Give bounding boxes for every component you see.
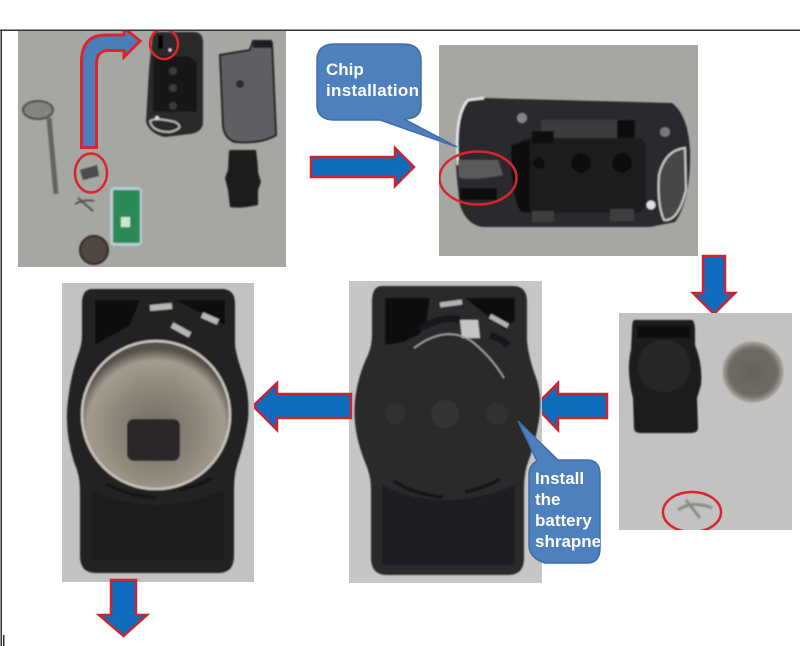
callout ring: chip location xyxy=(440,152,516,204)
arrow: step three to step four xyxy=(535,383,607,430)
icon: coin battery xyxy=(80,236,108,264)
icon: fob shell with cavity xyxy=(146,32,203,137)
callout ring: shrapnel xyxy=(663,492,721,532)
icon: small battery holder xyxy=(629,320,701,433)
icon: rubber battery holder xyxy=(67,289,248,573)
callout: chip installation xyxy=(317,44,457,147)
icon: chip xyxy=(80,165,99,180)
icon: coin battery xyxy=(724,342,782,402)
panel: battery fitted in holder xyxy=(62,283,254,582)
callout ring: chip xyxy=(75,154,107,192)
icon: back cover xyxy=(220,40,276,142)
callout: install the battery shrapnel: shrapnel xyxy=(535,532,606,551)
callout: install the battery shrapnel: Install xyxy=(535,469,584,488)
icon: rubber battery holder xyxy=(354,286,540,575)
panel: holder, battery and shrapnel xyxy=(619,313,792,532)
icon: three screws xyxy=(533,153,632,173)
callout: install the battery shrapnel: the xyxy=(535,490,560,509)
icon: circuit board xyxy=(110,187,142,246)
callout ring: chip slot xyxy=(150,29,178,59)
icon: battery holder small xyxy=(225,150,261,208)
icon: dark square mark on battery xyxy=(127,419,180,461)
callout: install the battery shrapnel xyxy=(518,421,606,563)
icon: shrapnel xyxy=(678,500,712,518)
panel: holder with shrapnel fitted xyxy=(349,281,542,583)
arrow: step two to step three xyxy=(693,256,735,314)
icon: coin battery xyxy=(82,341,230,489)
icon: metal shrapnel contact xyxy=(414,302,508,378)
icon: chrome key loop xyxy=(659,148,686,220)
panel: parts laid out xyxy=(18,28,286,267)
callout: chip installation: Chip xyxy=(326,60,364,79)
arrow: step one to step two xyxy=(311,148,414,186)
panel: chip installed in fob xyxy=(439,45,698,256)
icon: chip in slot xyxy=(458,160,503,179)
callout: chip installation: installation xyxy=(326,81,419,100)
icon: metal contacts xyxy=(150,306,218,335)
icon: metal key blade xyxy=(23,101,56,194)
callout: install the battery shrapnel: battery xyxy=(535,511,592,530)
icon: empty slot xyxy=(460,188,497,200)
arrow: continue downward xyxy=(99,580,147,636)
arrow: step four to step five xyxy=(253,383,351,430)
arrow: red outlined blue route arrow xyxy=(82,28,140,148)
icon: shrapnel spring xyxy=(75,198,94,211)
